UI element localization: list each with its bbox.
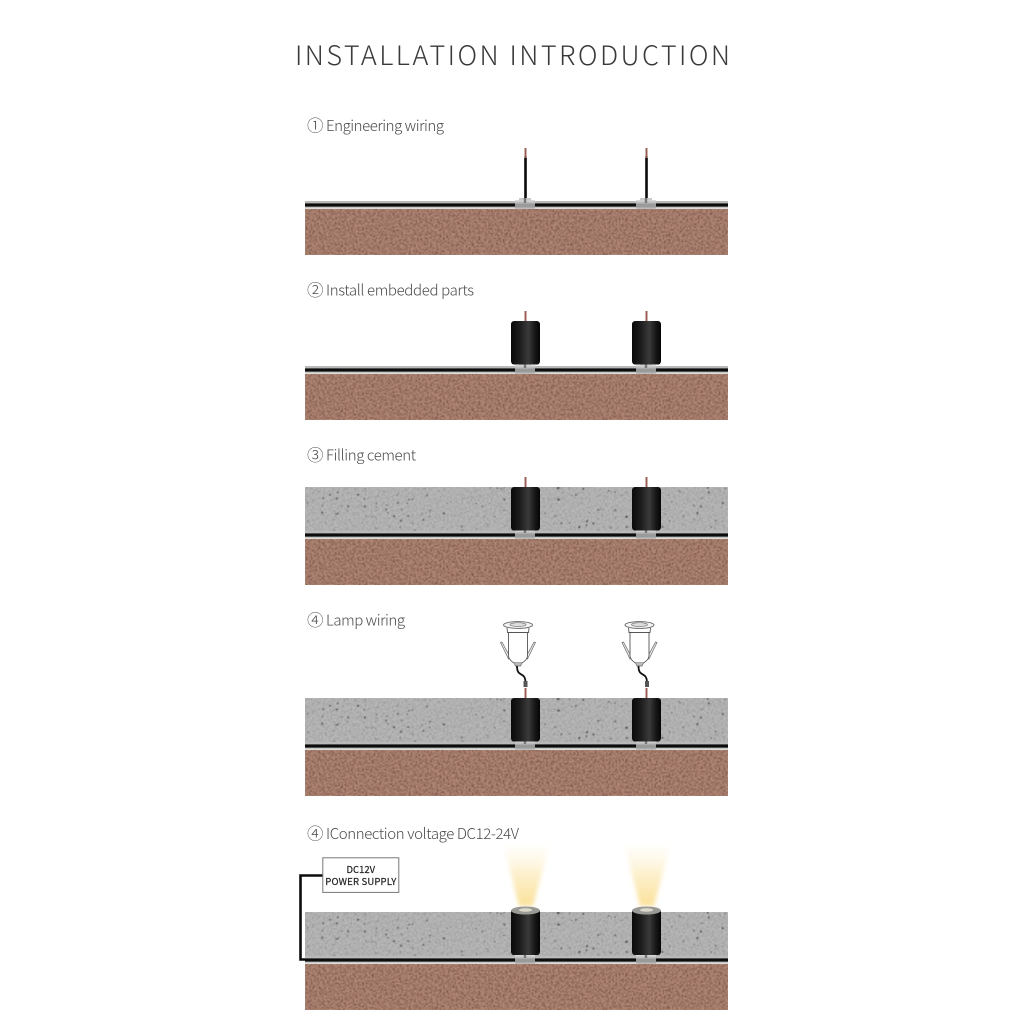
power supply box	[323, 858, 399, 892]
step 4 heading: Lamp wiring	[326, 610, 405, 630]
panel: step 3 filling cement	[305, 442, 728, 585]
step 2 conduit strip	[305, 366, 728, 374]
step 2 left embedded part	[511, 311, 540, 374]
step 4 heading: ④	[307, 607, 324, 631]
panel: step 4 lamp wiring	[305, 607, 728, 796]
title: INSTALLATION INTRODUCTION	[295, 34, 730, 73]
step 4 conduit strip	[305, 742, 728, 750]
panel: step 2 install embedded parts	[305, 277, 728, 420]
step 2 heading: Install embedded parts	[326, 280, 474, 300]
step 3 concrete layer	[305, 487, 728, 531]
step 3 heading: ③	[307, 442, 324, 466]
step 2 heading: ②	[307, 277, 324, 301]
step 3 heading: Filling cement	[326, 444, 417, 466]
step 4 left embedded part	[511, 688, 540, 750]
step 2 earth layer	[305, 374, 728, 420]
step 3 conduit strip	[305, 531, 728, 539]
step 1 heading: ①	[307, 112, 324, 136]
step 2 right embedded part	[632, 311, 661, 374]
step 5 conduit strip	[305, 956, 728, 964]
step 5 earth layer	[305, 964, 728, 1010]
step 1 earth layer	[305, 209, 728, 255]
step 4 earth layer	[305, 750, 728, 796]
power supply box: DC12V	[346, 862, 376, 876]
step 1 right connector and wire	[636, 148, 656, 209]
step 3 right embedded part	[632, 477, 661, 539]
panel: step 5 connection voltage	[300, 820, 728, 1010]
icon: left lamp	[500, 622, 536, 687]
icon: right lamp	[622, 622, 657, 687]
right lit lamp	[625, 846, 670, 964]
left lit lamp	[504, 846, 549, 964]
power supply box: POWER SUPPLY	[325, 874, 397, 888]
power supply wire	[300, 876, 323, 960]
step 5 heading: ④	[307, 820, 324, 844]
step 4 right embedded part	[632, 688, 661, 750]
step 5 concrete layer	[305, 912, 728, 956]
step 3 earth layer	[305, 539, 728, 585]
step 1 heading: Engineering wiring	[326, 115, 444, 136]
panel: step 1 engineering wiring	[305, 112, 728, 255]
step 4 concrete layer	[305, 698, 728, 742]
step 3 left embedded part	[511, 477, 540, 539]
step 1 left connector and wire	[515, 148, 535, 209]
step 5 heading: IConnection voltage DC12-24V	[326, 823, 520, 844]
step 1 conduit strip	[305, 201, 728, 209]
